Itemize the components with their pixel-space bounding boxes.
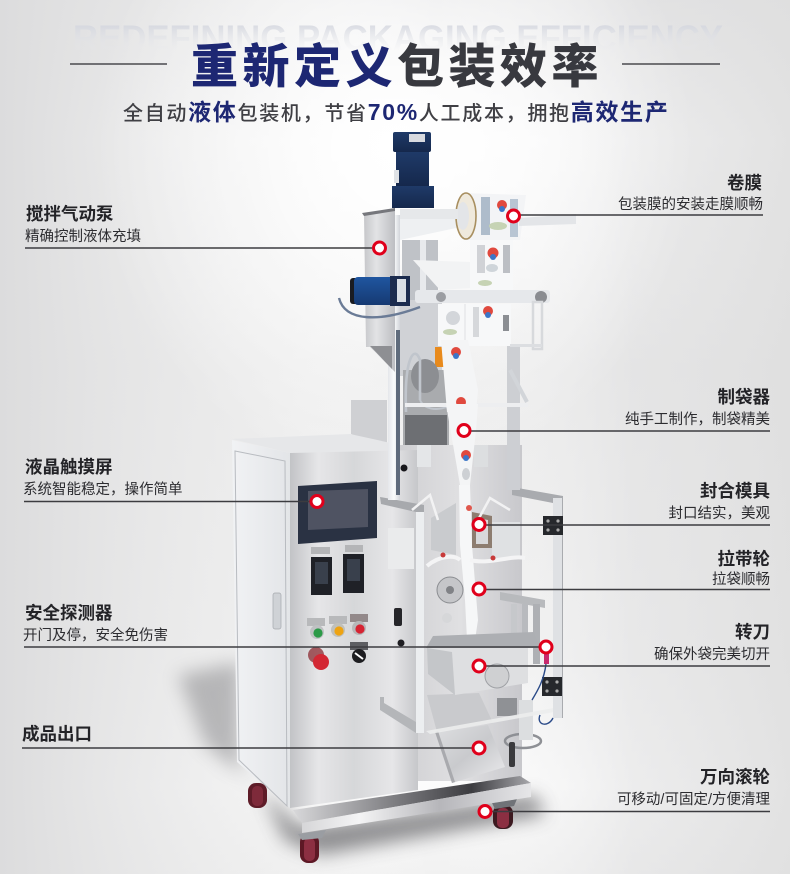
callout: 成品出口: [22, 724, 485, 754]
title: 重新定义包装效率: [191, 40, 603, 93]
callout: 液晶触摸屏: [23, 457, 323, 508]
callout: 万向滚轮: [479, 767, 770, 818]
bag former and film tube: [441, 340, 478, 640]
watermark heading: REDEFINING PACKAGING EFFICIENCY: REDEFINING PACKAGING EFFICIENCY: [73, 19, 723, 58]
side frame right with hinges: [512, 487, 563, 718]
wheels: [248, 783, 517, 863]
control buttons: [307, 464, 408, 670]
film roll: [400, 193, 576, 240]
temperature controllers: [311, 545, 364, 595]
callout: 安全探测器: 安全探测器: [25, 603, 113, 623]
callout: 转刀: [473, 622, 770, 672]
pump motor: [339, 276, 420, 317]
upper cabinet box: [351, 400, 387, 448]
sealing mold: [388, 495, 525, 569]
packaging machine: [232, 132, 576, 863]
callout: 搅拌气动泵: 搅拌气动泵: [26, 204, 114, 224]
cabinet door: [232, 440, 290, 808]
rear panel: [398, 445, 522, 781]
touch screen: [298, 481, 377, 544]
base tray: [293, 776, 531, 833]
callout: 转刀: 确保外袋完美切开: [654, 646, 770, 663]
top frame box: [400, 212, 470, 240]
callout: 封合模具: 封口结实，美观: [668, 505, 770, 522]
callout: 卷膜: 卷膜: [727, 173, 762, 193]
cable strip: [396, 330, 400, 495]
callout: 制袋器: [458, 387, 770, 436]
machine shadow: [178, 662, 545, 855]
callout: 拉带轮: 拉带轮: [718, 549, 770, 569]
subtitle: 全自动液体包装机，节省70%人工成本，拥抱高效生产: [123, 99, 670, 125]
callout: 封合模具: [473, 481, 770, 530]
callout: 液晶触摸屏: 液晶触摸屏: [25, 457, 112, 477]
callout: 转刀: 转刀: [735, 622, 770, 642]
callout: 制袋器: 制袋器: [718, 387, 770, 407]
printed film web: [413, 240, 513, 346]
callout: 液晶触摸屏: 系统智能稳定，操作简单: [23, 481, 182, 498]
callout: 搅拌气动泵: 精确控制液体充填: [25, 228, 141, 245]
callout: 万向滚轮: 万向滚轮: [700, 767, 770, 787]
handwheel: [497, 698, 541, 767]
guard plate: [426, 708, 554, 734]
side frame left: [380, 497, 424, 733]
callout: 拉带轮: 拉袋顺畅: [712, 571, 770, 588]
hopper: [362, 208, 395, 372]
callout: 安全探测器: 开门及停，安全免伤害: [23, 626, 168, 644]
callout: 安全探测器: [23, 603, 552, 653]
chute: [427, 693, 505, 783]
callout: 拉带轮: [473, 549, 770, 595]
callout: 封合模具: 封合模具: [700, 481, 770, 501]
callout: 搅拌气动泵: [25, 204, 386, 254]
cabinet front: [290, 450, 418, 808]
callout: 制袋器: 纯手工制作，制袋精美: [625, 411, 770, 428]
callout: 万向滚轮: 可移动/可固定/方便清理: [617, 791, 770, 808]
callout: 卷膜: 包装膜的安装走膜顺畅: [618, 196, 763, 213]
horizontal roller: [415, 290, 550, 349]
forming column right: [507, 345, 520, 490]
mixer motor: [392, 132, 434, 208]
callout: 成品出口: 成品出口: [22, 724, 92, 744]
forming column left: [388, 215, 400, 500]
cabinet top: [232, 434, 400, 453]
pump and hose assembly: [403, 347, 528, 467]
callout: 卷膜: [508, 173, 763, 222]
pull wheel: [437, 577, 545, 664]
rotary cutter block: [426, 632, 553, 724]
